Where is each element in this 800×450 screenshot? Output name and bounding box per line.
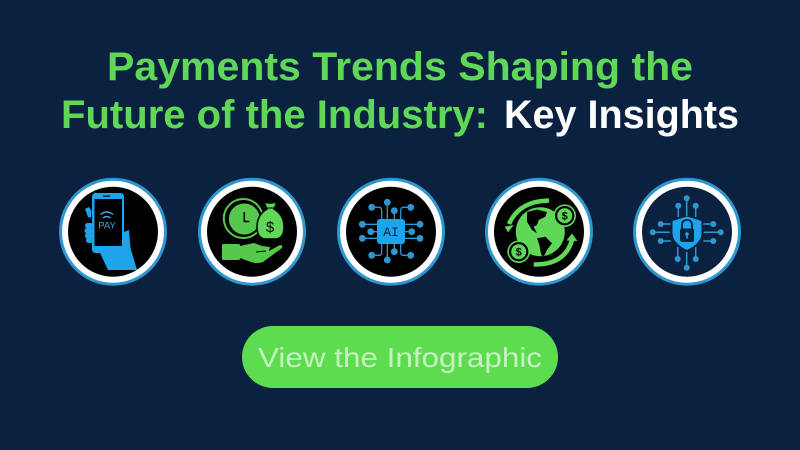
icon: mobile payment: PAY	[98, 220, 116, 232]
icon: AI chip	[337, 178, 445, 286]
icon: global payments: $	[516, 247, 522, 259]
icon: security shield	[633, 178, 741, 286]
button: view the infographic	[242, 326, 558, 388]
button: view the infographic: View the Infographic	[258, 342, 542, 373]
title	[61, 45, 739, 137]
icon: time and money	[198, 178, 306, 286]
icon: mobile payment	[59, 178, 167, 286]
title: Future of the Industry:	[61, 93, 488, 137]
title: Payments Trends Shaping the	[107, 45, 693, 89]
title: Key Insights	[504, 93, 739, 137]
icon: time and money: $	[266, 219, 275, 236]
icon: global payments: $	[562, 211, 568, 223]
icon: AI chip: AI	[383, 225, 399, 240]
icon: global payments	[485, 178, 593, 286]
